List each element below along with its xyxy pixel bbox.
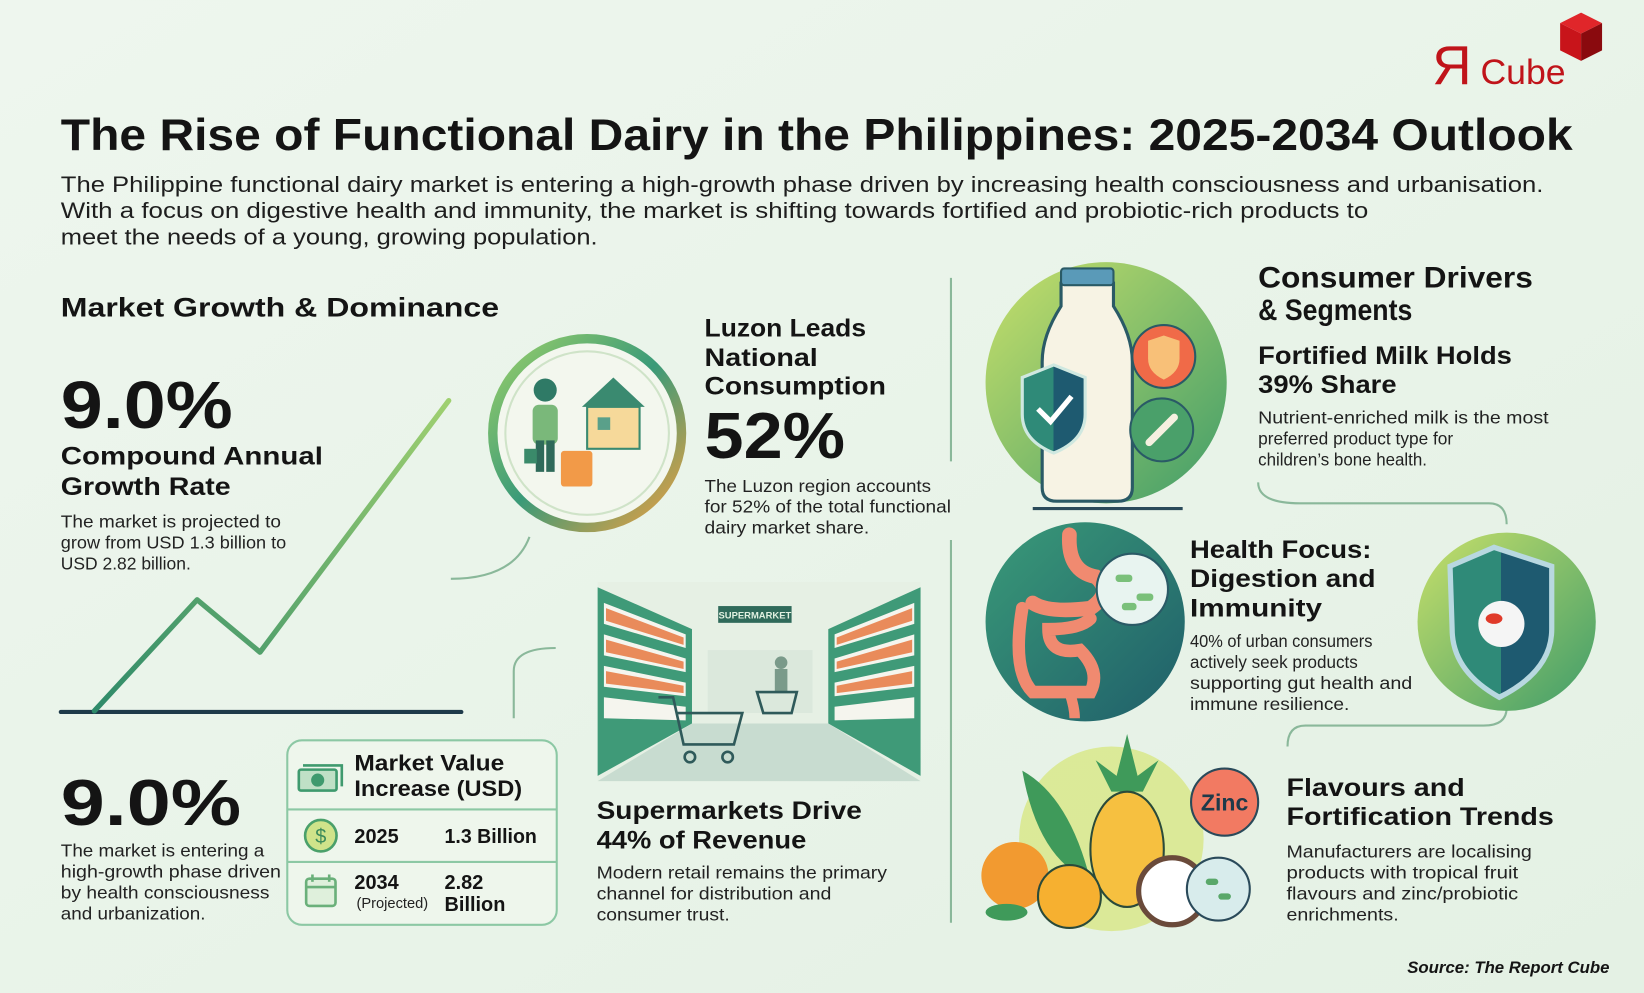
consumer drivers heading: Fortified Milk Holds: [1258, 342, 1512, 370]
CAGR stat: Compound Annual: [61, 443, 323, 471]
table: market value increase: 2034: [354, 872, 399, 894]
illustration: supermarket: [598, 582, 921, 781]
table: market value increase: 2025: [354, 826, 399, 848]
CAGR stat: Growth Rate: [61, 473, 231, 501]
icon: money: [299, 765, 342, 791]
health focus text: Digestion and: [1190, 565, 1376, 593]
icon: probiotic bubble: [1187, 858, 1250, 921]
icon: calendar: [306, 874, 336, 906]
Luzon text block: [705, 315, 951, 538]
consumer drivers heading: Nutrient-enriched milk is the most: [1258, 408, 1549, 428]
supermarket text block: channel for distribution and: [597, 884, 831, 904]
health focus text: immune resilience.: [1190, 694, 1349, 714]
CAGR stat: USD 2.82 billion.: [61, 553, 191, 573]
table: market value increase: Increase (USD): [354, 776, 522, 801]
icon: zinc bubble: [1191, 769, 1258, 836]
consumer drivers heading: Consumer Drivers: [1258, 261, 1533, 294]
health focus text: Health Focus:: [1190, 536, 1371, 564]
second stat: and urbanization.: [61, 904, 205, 924]
supermarket text block: [597, 797, 887, 925]
table: market value increase: [287, 740, 557, 925]
table: market value increase: 2.82: [445, 872, 483, 894]
flavours text: Fortification Trends: [1286, 803, 1554, 831]
Luzon text block: dairy market share.: [705, 518, 869, 538]
Luzon text block: Consumption: [705, 372, 886, 400]
Luzon text block: for 52% of the total functional: [705, 497, 951, 517]
consumer drivers heading: preferred product type for: [1258, 429, 1453, 449]
Luzon text block: National: [705, 344, 818, 372]
flavours text: enrichments.: [1286, 905, 1399, 925]
table: market value increase: 1.3 Billion: [445, 826, 537, 848]
health focus text: supporting gut health and: [1190, 673, 1412, 693]
Luzon text block: Luzon Leads: [705, 315, 866, 343]
illustration: supermarket: SUPERMARKET: [719, 610, 792, 621]
CAGR stat: The market is projected to: [61, 511, 281, 531]
icon: zinc bubble: Zinc: [1201, 790, 1248, 816]
second stat: high-growth phase driven: [61, 862, 281, 882]
icon: dollar coin: [305, 820, 337, 851]
Luzon text block: The Luzon region accounts: [705, 476, 931, 496]
icon: dollar coin: $: [315, 826, 326, 848]
icon: immunity shield circle: [1418, 533, 1596, 711]
growth line chart: [61, 401, 461, 712]
second stat: The market is entering a: [61, 841, 265, 861]
flavours text: Manufacturers are localising: [1286, 842, 1532, 862]
subtitle: The Philippine functional dairy market is entering a high-growth phase driven by increasing health consciousness and urbanisation.: [61, 172, 1543, 197]
icon: milk bottle circle: [986, 262, 1227, 509]
flavours text: Flavours and: [1286, 774, 1465, 802]
title: The Rise of Functional Dairy in the Philippines: 2025-2034 Outlook: [61, 111, 1573, 160]
subtitle: [61, 172, 1543, 249]
table: market value increase: Billion: [445, 894, 505, 916]
icon: tropical fruits: [981, 734, 1206, 931]
consumer drivers heading: 39% Share: [1258, 371, 1397, 399]
section heading: market growth: Market Growth & Dominance: [61, 292, 499, 323]
subtitle: With a focus on digestive health and immunity, the market is shifting towards fortified and probiotic-rich products to: [61, 198, 1368, 223]
supermarket text block: Modern retail remains the primary: [597, 863, 887, 883]
CAGR stat: grow from USD 1.3 billion to: [61, 532, 286, 552]
logo: Я: [1432, 35, 1472, 96]
logo: Cube: [1480, 52, 1566, 92]
supermarket text block: 44% of Revenue: [597, 826, 806, 854]
icon: Luzon circle with person and house: [493, 339, 682, 527]
health focus text: Immunity: [1190, 595, 1322, 623]
logo: [1432, 13, 1602, 96]
consumer drivers heading: [1258, 261, 1549, 470]
subtitle: meet the needs of a young, growing population.: [61, 224, 598, 249]
consumer drivers heading: & Segments: [1258, 294, 1412, 327]
CAGR stat: 9.0%: [61, 368, 233, 443]
consumer drivers heading: children’s bone health.: [1258, 450, 1427, 470]
health focus text: [1190, 536, 1412, 714]
source: Source: The Report Cube: [1407, 958, 1609, 977]
flavours text: flavours and zinc/probiotic: [1286, 884, 1519, 904]
CAGR stat: [61, 368, 323, 573]
second stat: 9.0%: [61, 766, 241, 839]
flavours text: [1286, 774, 1554, 925]
second stat: [61, 766, 281, 924]
icon: gut health circle: [986, 522, 1185, 721]
table: market value increase: (Projected): [356, 896, 428, 912]
health focus text: 40% of urban consumers: [1190, 631, 1373, 651]
health focus text: actively seek products: [1190, 652, 1358, 672]
supermarket text block: consumer trust.: [597, 905, 730, 925]
Luzon text block: 52%: [705, 399, 845, 472]
supermarket text block: Supermarkets Drive: [597, 797, 862, 825]
table: market value increase: Market Value: [354, 751, 504, 776]
second stat: by health consciousness: [61, 883, 270, 903]
flavours text: products with tropical fruit: [1286, 863, 1518, 883]
